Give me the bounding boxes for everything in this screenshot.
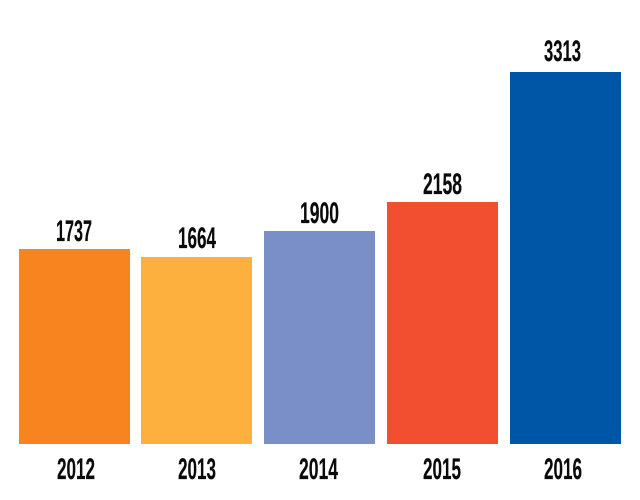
- value label: 2158: 2158: [423, 168, 462, 201]
- bar group: 2012: [19, 215, 130, 486]
- bar: 2015: [387, 202, 498, 444]
- year label: 2014: 2014: [299, 453, 338, 486]
- bar group: 2014: [264, 197, 375, 486]
- value label: 1737: 1737: [56, 215, 92, 248]
- bar: 2012: [19, 249, 130, 444]
- bar group: 2015: [387, 168, 498, 486]
- bar: 2013: [141, 257, 252, 444]
- year label: 2012: 2012: [57, 453, 95, 486]
- bar: 2014: [264, 231, 375, 444]
- bar group: 2013: [141, 222, 252, 486]
- year label: 2016: 2016: [544, 453, 582, 486]
- value label: 3313: 3313: [544, 35, 581, 68]
- value label: 1664: 1664: [178, 222, 216, 255]
- value label: 1900: 1900: [300, 197, 339, 230]
- year label: 2013: 2013: [178, 453, 216, 486]
- bar: 2016: [510, 72, 621, 444]
- year label: 2015: 2015: [423, 453, 461, 486]
- bar group: 2016: [510, 35, 621, 486]
